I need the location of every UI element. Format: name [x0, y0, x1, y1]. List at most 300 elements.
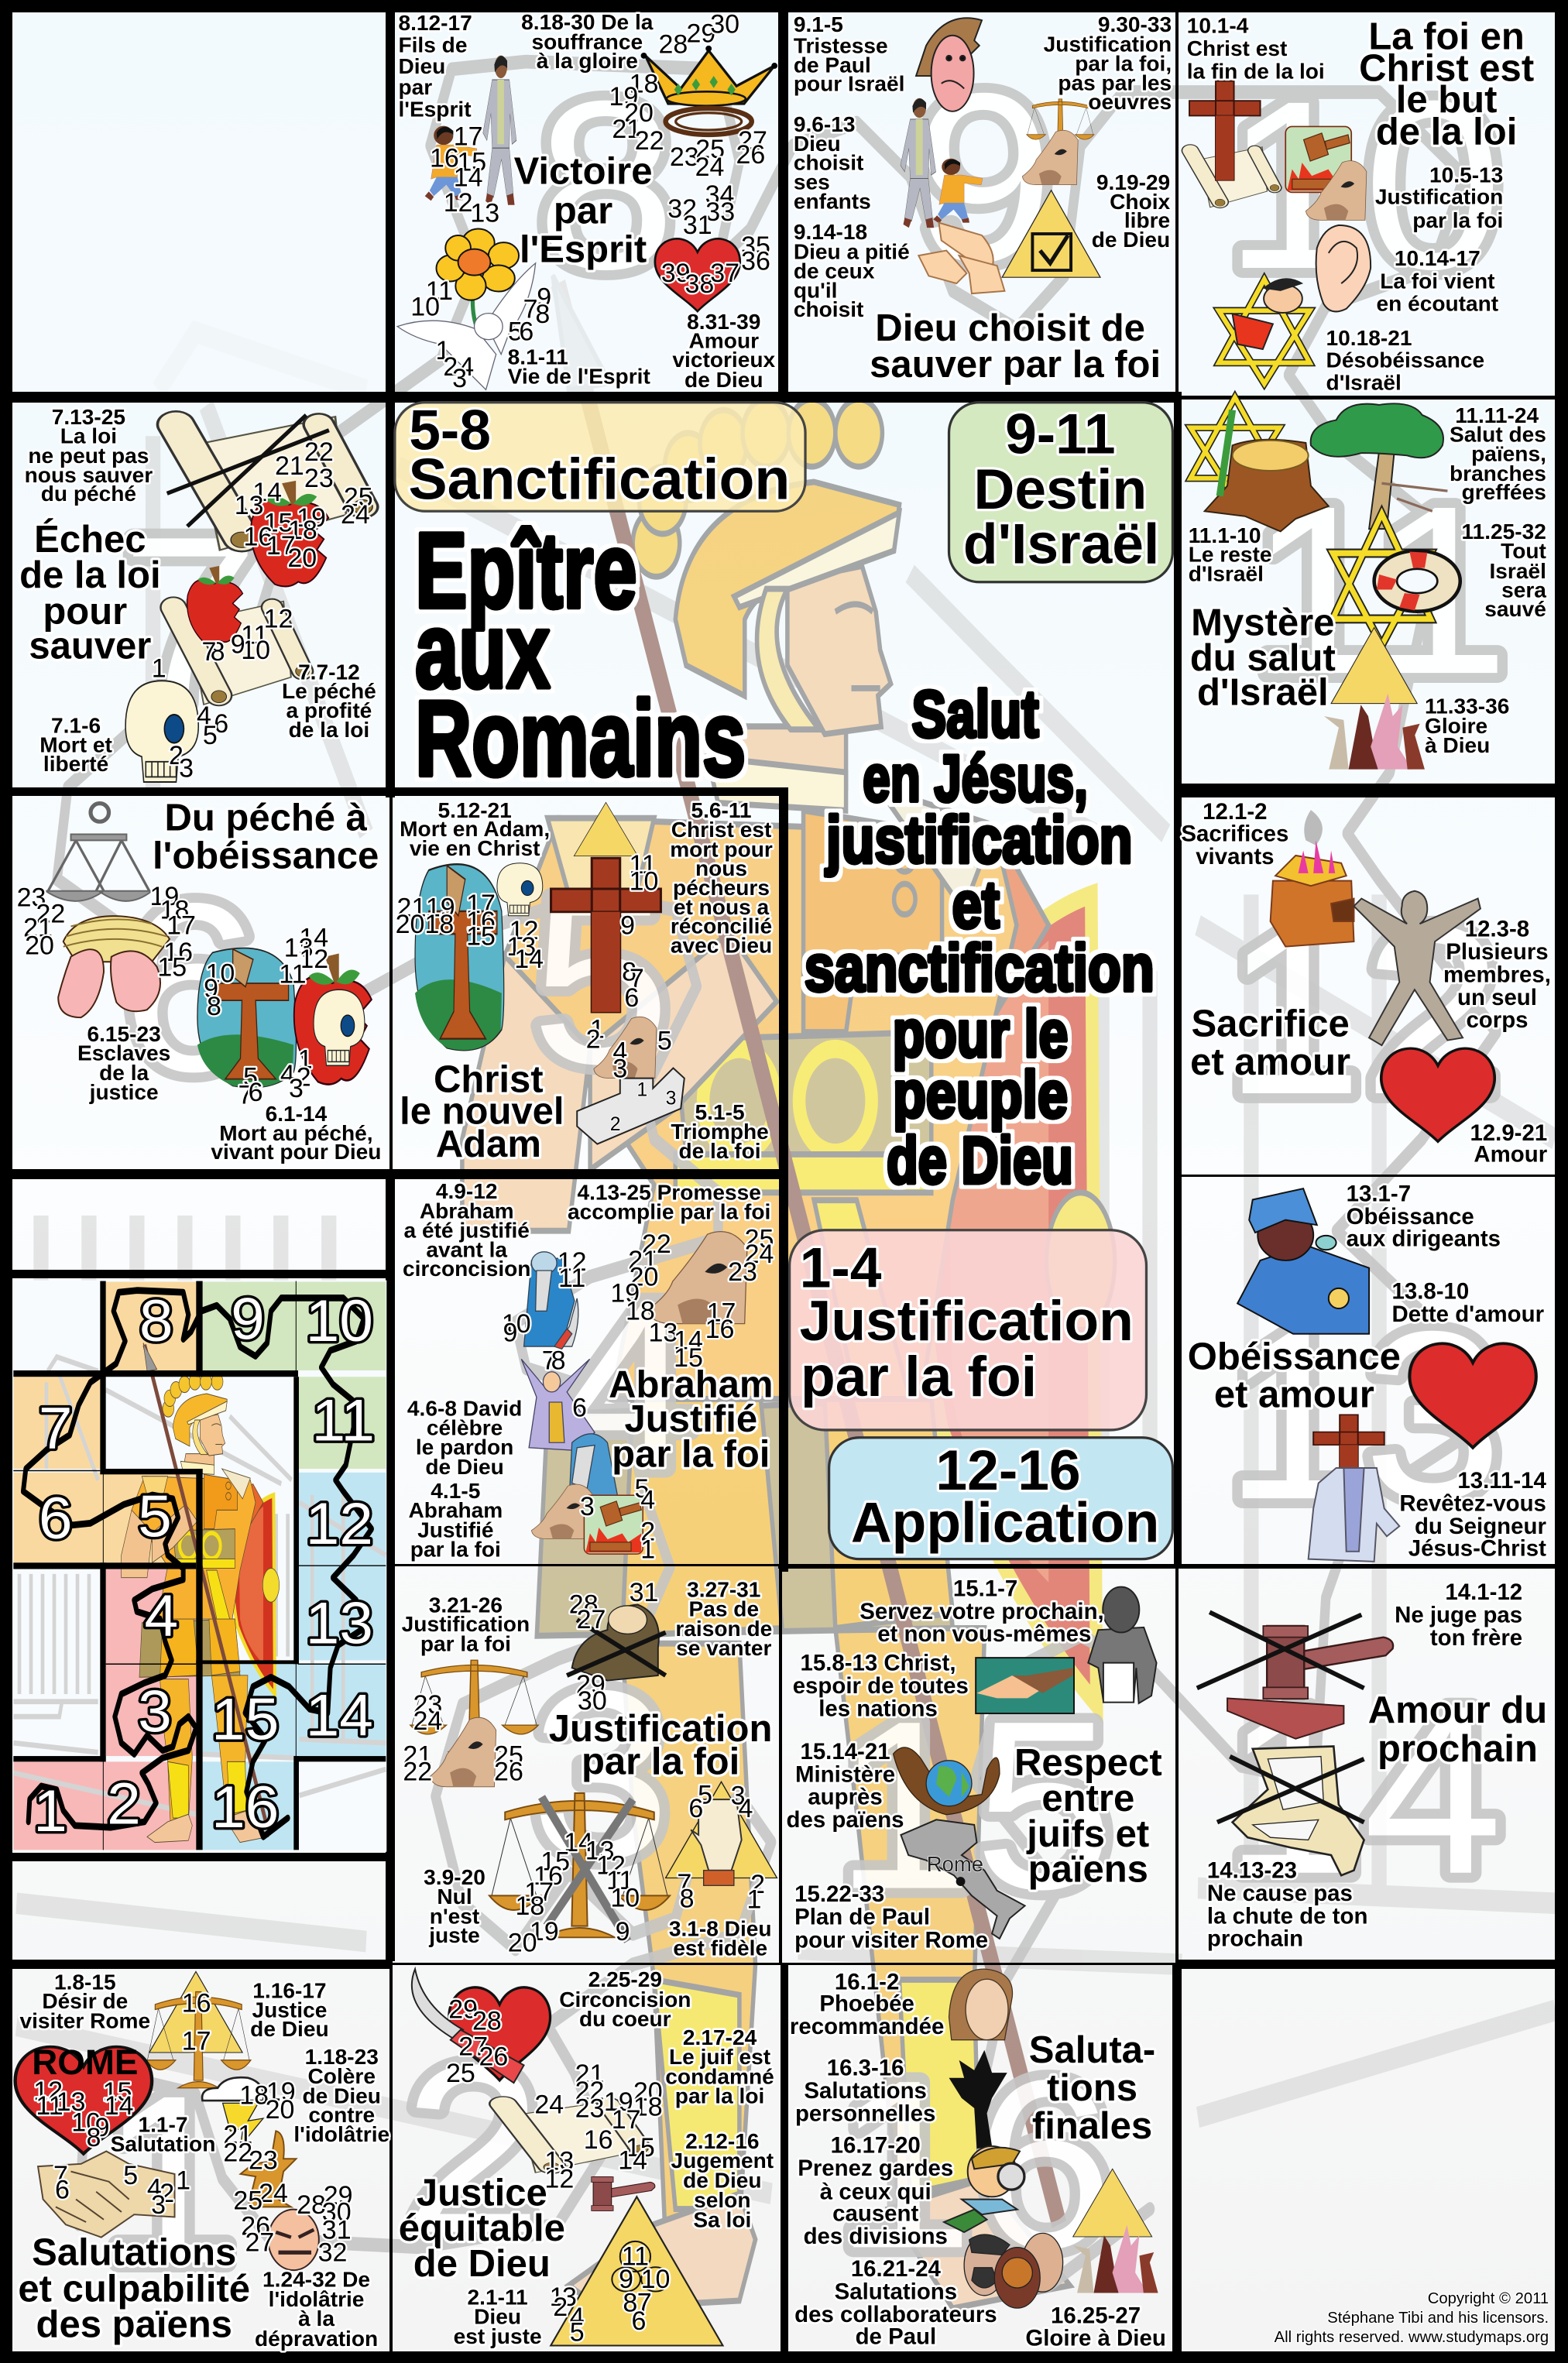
icon: tree with cross — [415, 864, 504, 1050]
verse numbers: 16 — [430, 144, 459, 173]
verse numbers: 30 — [578, 1686, 607, 1716]
label 6.1-14: Mort au péché, — [219, 1121, 373, 1145]
verse numbers: 13 — [235, 491, 264, 520]
verse labels: pour visiter Rome — [794, 1928, 988, 1953]
verse labels: oeuvres — [1088, 90, 1172, 114]
verse numbers: 12 — [544, 2165, 574, 2194]
icon: boy with magnifying glass — [944, 2146, 1024, 2232]
verse labels: 15.14-21 — [800, 1739, 890, 1765]
verse labels: 13.11-14 — [1457, 1468, 1547, 1494]
verse labels: Choix — [1110, 190, 1171, 214]
label 4.9-12: avant la — [426, 1237, 507, 1261]
verse numbers: 26 — [479, 2042, 508, 2071]
verse numbers: 19 — [297, 503, 326, 533]
verse labels: 14.13-23 — [1207, 1857, 1297, 1883]
verse labels: Sacrifices — [1181, 821, 1288, 847]
verse numbers: 5 — [203, 721, 218, 750]
panel: chapter 15 Respect entre juifs et païens — [787, 1576, 1162, 1953]
verse numbers: 18 — [626, 1296, 655, 1326]
heading: Dieu choisit de sauver par la foi: sauver par la foi — [870, 344, 1161, 386]
label 5.6-11: avec Dieu — [671, 933, 772, 957]
icon: golden calf — [241, 2131, 296, 2207]
verse labels: 15.8-13 Christ, — [800, 1650, 956, 1675]
verse numbers: 18 — [288, 516, 317, 545]
verse labels: la chute de ton — [1207, 1903, 1367, 1929]
label 4.13-25: accomplie par la foi — [568, 1199, 770, 1223]
verse labels: Phoebée — [819, 1991, 914, 2016]
verse numbers: 13 — [585, 1836, 615, 1865]
label 5.6-11: Christ est — [671, 818, 772, 842]
panel: 12-16 Application heading: Application — [851, 1490, 1159, 1554]
verse numbers: 10 — [630, 866, 658, 896]
verse numbers: 14 — [514, 945, 544, 974]
verse numbers: 19 — [150, 882, 179, 911]
verse labels: greffées — [1462, 480, 1546, 504]
verse numbers: 23 — [670, 142, 699, 172]
verse numbers: 6 — [632, 2306, 646, 2336]
verse labels: Plan de Paul — [794, 1905, 930, 1930]
verse labels — [790, 1969, 1166, 2351]
copyright notice: Stéphane Tibi and his licensors. — [1327, 2310, 1549, 2327]
icon: nose — [1306, 161, 1367, 220]
label 5.6-11: mort pour — [670, 837, 773, 861]
icon: small nose — [531, 1484, 592, 1538]
verse numbers: 17 — [182, 2027, 211, 2056]
panel: 5-8 Sanctification heading: Sanctification — [409, 447, 790, 512]
verse numbers: 21 — [403, 1741, 432, 1770]
label 5.1-5: 5.1-5 — [695, 1100, 745, 1124]
icon: ear — [1316, 225, 1371, 311]
verse labels: Ne juge pas — [1395, 1602, 1522, 1627]
icon: scale crossed out in grey — [489, 1793, 670, 1941]
verse labels: Amour — [1474, 1141, 1547, 1167]
icon: triangle with scale — [551, 2197, 722, 2346]
icon: man — [901, 98, 936, 228]
icon: podium: 2 — [610, 1114, 621, 1135]
verse numbers: 13 — [57, 2087, 85, 2117]
icon: hands holding the globe — [894, 1747, 1000, 1815]
label 6.15-23: 6.15-23 — [87, 1022, 161, 1046]
verse numbers: 17 — [166, 911, 196, 940]
panel: chapter 4 Abraham justifié — [403, 1179, 774, 1564]
icon: scroll — [503, 2100, 648, 2173]
verse numbers: 8 — [623, 2289, 637, 2318]
verse numbers: 4 — [197, 701, 211, 731]
verse numbers: 20 — [508, 1928, 537, 1957]
verse labels — [1207, 1579, 1522, 1952]
central summary: Salut en Jésus: et — [952, 869, 1000, 941]
verse numbers: 11 — [606, 1866, 633, 1895]
panel: 1-4 Justification par la foi heading: Justification — [800, 1289, 1134, 1353]
heading: Salutations et culpabilité des païens: Salutations — [32, 2232, 236, 2274]
central summary: Salut en Jésus: Salut — [911, 678, 1039, 751]
verse numbers: 31 — [630, 1578, 658, 1607]
icon: crossed-out trap — [1217, 1747, 1364, 1875]
central summary: Salut en Jésus: en Jésus, — [863, 741, 1088, 815]
label 4.6-8: 4.6-8 David — [407, 1397, 522, 1421]
verse numbers: 37 — [710, 259, 739, 288]
panel: chapter 10 La foi en Christ — [1187, 13, 1534, 394]
verse labels: causent — [832, 2201, 919, 2227]
icon: crown of thorns — [666, 108, 752, 135]
verse numbers: 21 — [275, 451, 304, 481]
verse numbers: 4 — [612, 1037, 627, 1067]
label 2.25-29: 2.25-29 — [588, 1967, 662, 1991]
verse numbers: 12 — [558, 1247, 587, 1277]
verse numbers: 10 — [641, 2265, 670, 2294]
verse numbers: 7 — [630, 964, 644, 993]
label 5.12-21: 5.12-21 — [438, 798, 512, 822]
verse numbers: 10 — [205, 959, 235, 988]
icon: cross above jacket — [1313, 1415, 1384, 1500]
panel: 9-11 Destin d'Israël heading: Destin — [973, 458, 1147, 521]
top row wash over backdrop — [12, 12, 1555, 392]
panel: chapter 5 Christ le nouvel Adam — [396, 798, 773, 1165]
panel: 12-16 Application heading: 12-16 — [935, 1439, 1081, 1502]
verse numbers: 11 — [622, 2242, 649, 2272]
verse labels — [787, 1576, 1104, 1953]
verse labels: ses — [794, 170, 830, 194]
verse labels: 10.14-17 — [1395, 246, 1481, 270]
label 8.12-17: Fils de — [398, 33, 467, 57]
icon: dove — [397, 263, 536, 389]
verse labels: des païens — [787, 1807, 904, 1833]
verse labels: par la foi — [1412, 208, 1503, 232]
verse numbers: 16 — [182, 1989, 211, 2018]
label 1.16-17: 1.16-17 — [252, 1978, 327, 2002]
label 5.6-11: 5.6-11 — [691, 798, 752, 822]
label 7.7-12: Le péché — [282, 679, 376, 703]
verse numbers: 18 — [516, 1891, 544, 1921]
verse numbers: 1 — [436, 336, 450, 365]
label 2.12-16: de Dieu — [683, 2169, 762, 2193]
verse labels: de ceux — [794, 259, 875, 283]
icon: heart — [1381, 1048, 1494, 1141]
verse numbers: 30 — [322, 2198, 352, 2228]
verse numbers: 11 — [630, 850, 657, 880]
verse numbers: 5 — [570, 2318, 585, 2348]
verse labels: 10.5-13 — [1429, 163, 1503, 187]
label 3.1-8: 3.1-8 Dieu — [669, 1917, 772, 1941]
verse numbers: 7 — [202, 637, 216, 667]
verse numbers — [396, 850, 672, 1083]
label 5.6-11: réconcilié — [671, 914, 772, 938]
verse numbers: 24 — [745, 1240, 774, 1269]
icon: grafted tree — [1311, 403, 1447, 529]
heading: Échec de la loi pour sauver: sauver — [29, 625, 151, 667]
verse numbers: 13 — [284, 934, 314, 963]
verse labels: libre — [1124, 208, 1170, 232]
verse numbers: 1 — [176, 2166, 190, 2196]
verse labels: 12.9-21 — [1470, 1120, 1547, 1146]
verse labels: Prenez gardes — [798, 2156, 953, 2181]
verse numbers: 20 — [25, 931, 54, 960]
verse numbers: 4 — [147, 2173, 162, 2203]
verse numbers: 28 — [297, 2190, 326, 2220]
verse numbers: 31 — [683, 211, 712, 240]
label 4.9-12: circoncision — [403, 1257, 530, 1281]
heading: Sacrifice et amour: et amour — [1190, 1041, 1350, 1083]
icon: scroll — [1190, 147, 1279, 207]
verse numbers: 25 — [344, 483, 373, 513]
verse labels: 16.25-27 — [1051, 2303, 1141, 2329]
verse labels: 12.3-8 — [1465, 917, 1529, 942]
verse numbers: 5 — [243, 1062, 258, 1092]
verse numbers: 12 — [33, 2077, 63, 2106]
verse numbers — [17, 882, 328, 1109]
verse numbers: 25 — [695, 135, 725, 164]
verse numbers: 4 — [738, 1794, 753, 1823]
label 8.12-17: 8.12-17 — [398, 11, 472, 35]
heading: Abraham Justifié par la foi: par la foi — [612, 1434, 770, 1476]
verse numbers: 14 — [564, 1828, 593, 1857]
verse labels: Servez votre prochain, — [859, 1599, 1104, 1624]
label 1.24-32: dépravation — [255, 2327, 378, 2351]
icon: heart Rome: ROME — [32, 2042, 138, 2082]
panel: 1-4 Justification par la foi heading: par la foi — [801, 1345, 1037, 1408]
verse numbers: 28 — [569, 1590, 599, 1620]
copyright notice: All rights reserved. www.studymaps.org — [1275, 2329, 1549, 2346]
label 4.1-5: Justifié — [417, 1518, 494, 1542]
verse numbers: 13 — [506, 932, 536, 962]
verse numbers: 17 — [524, 1878, 554, 1907]
verse numbers: 1 — [640, 1535, 655, 1564]
heading: Salutations finales: tions — [1047, 2067, 1137, 2109]
verse numbers: 3 — [731, 1782, 746, 1811]
verse labels: Dieu a pitié — [794, 240, 910, 264]
label 5.6-11: pécheurs — [673, 876, 770, 900]
icon: waving black hand — [949, 2050, 1007, 2149]
verse numbers: 22 — [403, 1757, 432, 1786]
verse numbers: 9 — [95, 2113, 110, 2142]
verse numbers — [152, 437, 373, 783]
heading: Sacrifice et amour: Sacrifice — [1191, 1003, 1350, 1044]
icon: angry head — [268, 2210, 319, 2270]
label 7.13-25: La loi — [60, 424, 117, 448]
verse labels: des collaborateurs — [794, 2302, 997, 2327]
verse labels: un seul — [1457, 985, 1537, 1010]
verse numbers: 30 — [710, 9, 739, 39]
verse numbers: 22 — [223, 2138, 252, 2168]
verse labels: Désobéissance — [1326, 348, 1484, 372]
label 2.25-29: du coeur — [579, 2007, 671, 2031]
label 5.1-5: Triomphe — [671, 1120, 769, 1144]
verse labels: Justification — [1044, 33, 1172, 57]
heading: Salutations finales: finales — [1032, 2105, 1152, 2147]
label 6.15-23: justice — [89, 1080, 159, 1104]
verse labels: 11.1-10 — [1189, 523, 1261, 547]
heading: Amour du prochain: Amour du — [1368, 1689, 1547, 1731]
verse numbers: 1 — [590, 1014, 605, 1044]
heading: Christ le nouvel Adam: Adam — [436, 1123, 541, 1165]
verse numbers: 28 — [472, 2007, 502, 2036]
label 8.12-17: Dieu — [398, 54, 445, 78]
verse numbers: 32 — [318, 2238, 347, 2267]
verse labels: Salut des — [1450, 423, 1546, 447]
panel: chapter 9 Dieu choisit — [794, 12, 1172, 386]
label 2.12-16: selon — [694, 2188, 751, 2212]
label 8.31-39: Amour — [689, 329, 759, 353]
verse numbers — [446, 1995, 670, 2348]
verse numbers: 25 — [233, 2186, 262, 2216]
verse numbers: 7 — [677, 1869, 691, 1898]
verse labels: branches — [1450, 461, 1546, 485]
label 3.27-31: se vanter — [676, 1636, 772, 1660]
verse numbers: 11 — [36, 2091, 63, 2121]
verse labels: 9.30-33 — [1098, 12, 1172, 36]
verse labels: Tout — [1501, 539, 1547, 563]
verse numbers: 29 — [686, 19, 715, 48]
icon: skull — [125, 681, 198, 782]
verse numbers: 11 — [558, 1264, 585, 1293]
verse numbers: 1 — [550, 2282, 564, 2312]
verse numbers: 25 — [446, 2059, 475, 2088]
heading: Respect entre juifs et païens: Respect — [1014, 1742, 1162, 1784]
heading: Abraham Justifié par la foi: Abraham — [609, 1363, 774, 1405]
icon: body with members — [1354, 891, 1481, 1045]
verse labels — [1187, 13, 1503, 394]
label 4.13-25: 4.13-25 Promesse — [577, 1180, 761, 1204]
verse numbers: 21 — [612, 115, 641, 144]
icon: small scroll — [173, 602, 309, 705]
verse numbers: 4 — [570, 2303, 585, 2332]
verse labels: à Dieu — [1425, 733, 1490, 757]
icon: crossed-out sleeping man — [567, 1604, 666, 1681]
panel: 5-8 Sanctification heading: 5-8 — [409, 398, 491, 461]
verse numbers: 9 — [231, 629, 245, 659]
central summary: Salut en Jésus: de Dieu — [887, 1124, 1073, 1198]
label 1.8-15: 1.8-15 — [54, 1970, 116, 1994]
verse labels: païens, — [1471, 442, 1546, 466]
verse labels: aux dirigeants — [1347, 1226, 1501, 1252]
verse numbers: 16 — [534, 1861, 563, 1891]
central summary: Salut en Jésus: pour le — [893, 997, 1068, 1071]
verse labels: 11.25-32 — [1462, 520, 1546, 544]
verse numbers: 9 — [619, 2265, 633, 2294]
verse numbers: 12 — [299, 945, 328, 974]
label 8.18-30: souffrance — [531, 29, 643, 53]
verse labels — [794, 12, 1172, 321]
verse labels: 9.6-13 — [794, 112, 856, 136]
verse numbers: 23 — [304, 464, 334, 493]
verse labels: Le reste — [1189, 543, 1271, 567]
verse numbers: 23 — [249, 2145, 278, 2175]
label 4.9-12: 4.9-12 — [436, 1179, 498, 1203]
verse numbers: 23 — [575, 2094, 604, 2124]
verse numbers: 8 — [535, 300, 550, 329]
label 2.1-11: 2.1-11 — [468, 2286, 528, 2310]
verse labels: Tristesse — [794, 34, 888, 58]
heading: Victoire par l'Esprit: Victoire — [514, 150, 653, 192]
verse numbers: 15 — [540, 1847, 570, 1877]
label 2.1-11: Dieu — [474, 2304, 521, 2328]
heading: Victoire par l'Esprit: par — [554, 190, 612, 231]
heading: Amour du prochain: prochain — [1378, 1728, 1538, 1770]
heading: Mystère du salut d'Israël: d'Israël — [1197, 672, 1329, 714]
verse labels: 13.1-7 — [1347, 1181, 1411, 1206]
verse numbers: 3 — [179, 753, 194, 783]
mini map: soldier with numbered chapter grid — [12, 1281, 386, 1852]
verse numbers: 2 — [443, 352, 458, 382]
icon: heart Rome — [15, 2042, 152, 2154]
label 1.18-23: 1.18-23 — [305, 2045, 379, 2069]
label 8.1-11: Vie de l'Esprit — [508, 365, 650, 389]
verse labels: Jésus-Christ — [1408, 1536, 1546, 1562]
verse labels: 13.8-10 — [1392, 1279, 1469, 1305]
label 7.13-25: nous sauver — [25, 463, 153, 487]
label 5.6-11: et nous a — [674, 895, 770, 919]
panel: 5-8 Sanctification heading — [395, 398, 805, 512]
verse labels: 11.33-36 — [1425, 694, 1509, 719]
label 5.12-21: vie en Christ — [410, 836, 540, 860]
heading: Obéissance et amour: et amour — [1214, 1374, 1374, 1416]
heading: Mystère du salut d'Israël: du salut — [1190, 637, 1336, 679]
icon: scale — [146, 1992, 251, 2088]
icon: map of Italy — [901, 1819, 1025, 1939]
verse labels: espoir de toutes — [793, 1673, 969, 1699]
verse labels: et non vous-mêmes — [877, 1621, 1091, 1647]
heading: Justice équitable de Dieu: de Dieu — [413, 2243, 551, 2285]
panel: 9-11 Destin d'Israël heading: d'Israël — [963, 513, 1159, 576]
icon: apple with skull — [294, 953, 372, 1085]
icon: Abraham seated — [569, 1434, 618, 1496]
verse numbers: 26 — [241, 2211, 270, 2241]
label 2.12-16: 2.12-16 — [685, 2129, 759, 2153]
icon: heart — [1409, 1343, 1536, 1448]
verse numbers: 5 — [508, 317, 523, 346]
verse labels: 12.1-2 — [1203, 799, 1268, 825]
verse numbers: 19 — [610, 1279, 640, 1308]
icon: heart with circumcision knife — [412, 1969, 551, 2083]
label 3.9-20: n'est — [430, 1904, 480, 1928]
label 1.8-15: visiter Rome — [20, 2009, 150, 2033]
verse numbers: 32 — [667, 194, 697, 224]
verse labels: 16.3-16 — [827, 2055, 904, 2080]
verse numbers: 8 — [207, 992, 221, 1021]
icon: skull — [497, 863, 543, 916]
heading: Échec de la loi pour sauver: pour — [43, 591, 127, 633]
verse numbers: 17 — [454, 122, 483, 152]
verse numbers: 10 — [71, 2107, 101, 2137]
central summary: Salut en Jésus: justification — [825, 803, 1133, 877]
verse numbers — [33, 1989, 353, 2267]
copyright notice — [1275, 2290, 1549, 2346]
icon: reaching hands — [918, 223, 1004, 293]
verse numbers: 15 — [264, 508, 293, 537]
verse numbers: 12 — [510, 916, 538, 945]
verse numbers: 26 — [494, 1757, 523, 1786]
verse labels: de Paul — [794, 53, 871, 77]
verse numbers: 20 — [630, 1263, 658, 1292]
verse numbers: 5 — [123, 2161, 138, 2190]
verse labels: en écoutant — [1377, 291, 1499, 315]
verse numbers: 2 — [586, 1024, 601, 1054]
icon: sad face — [916, 18, 982, 111]
icon: Abraham with knife — [524, 1252, 578, 1349]
verse numbers: 18 — [630, 70, 658, 99]
label 7.1-6: liberté — [43, 752, 108, 776]
verse numbers: 25 — [494, 1741, 523, 1770]
verse numbers: 26 — [736, 140, 765, 170]
verse labels: 16.21-24 — [851, 2256, 942, 2282]
verse numbers: 14 — [454, 163, 483, 193]
label 3.9-20: Nul — [437, 1885, 472, 1909]
panel: chapter 2 Justice équitable de Dieu — [399, 1967, 774, 2348]
verse numbers: 7 — [542, 1346, 557, 1375]
verse numbers: 15 — [674, 1343, 703, 1373]
verse numbers: 14 — [252, 478, 282, 507]
label 1.24-32: l'idolâtrie — [269, 2287, 364, 2311]
